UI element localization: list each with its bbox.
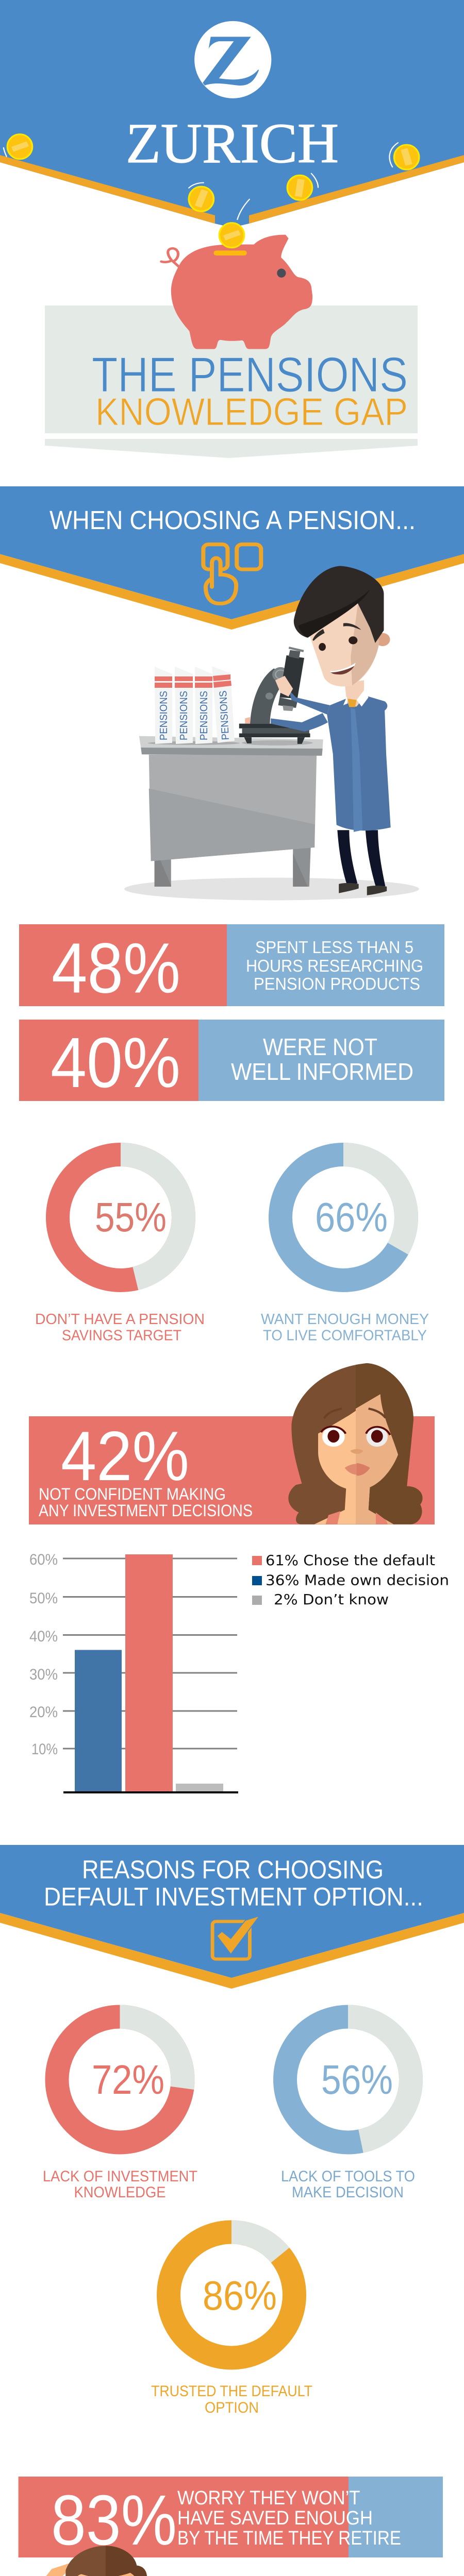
icon: piggy bank with coins	[4, 134, 419, 349]
stat description: PENSION PRODUCTS	[254, 974, 420, 993]
books labelled pensions	[155, 666, 235, 744]
section heading: REASONS FOR CHOOSING	[82, 1855, 384, 1884]
stat description: WORRY THEY WON’T	[177, 2487, 360, 2509]
stat description: HAVE SAVED ENOUGH	[177, 2507, 373, 2529]
section heading: DEFAULT INVESTMENT OPTION...	[44, 1883, 423, 1911]
stat description: SPENT LESS THAN 5	[255, 938, 413, 957]
stat description: NOT CONFIDENT MAKING	[39, 1485, 226, 1503]
header banner	[0, 0, 464, 228]
donut: 66 percent live comfortably: TO LIVE COMFORTABLY	[263, 1327, 427, 1344]
icon: Zurich Z logo	[194, 21, 271, 98]
stat description	[231, 1033, 413, 1085]
books labelled pensions: PENSIONS	[178, 691, 190, 740]
chart legend: 36% Made own decision	[266, 1571, 449, 1589]
stat description: HOURS RESEARCHING	[246, 956, 423, 975]
donut: 72 percent lack of knowledge: LACK OF INVESTMENT	[43, 2168, 197, 2185]
section heading: WHEN CHOOSING A PENSION...	[49, 505, 416, 535]
panel: 83 percent worry	[19, 2477, 443, 2560]
chart legend: 61% Chose the default	[266, 1552, 435, 1569]
bar chart: default vs own decision: 30%	[29, 1666, 58, 1683]
stat description: BY THE TIME THEY RETIRE	[177, 2528, 401, 2549]
stat number: 42%	[61, 1417, 189, 1495]
chart legend: 2% Don’t know	[274, 1591, 389, 1608]
stat description	[246, 938, 423, 993]
section heading	[44, 1855, 423, 1911]
icon: hand choosing a box	[203, 545, 261, 603]
bar chart: default vs own decision: 40%	[29, 1628, 58, 1645]
donut: 55 percent no savings target	[35, 1155, 205, 1344]
stat description: WERE NOT	[263, 1033, 377, 1060]
title text line 1: THE PENSIONS	[92, 347, 408, 402]
donut: 66 percent live comfortably: 66%	[315, 1194, 388, 1240]
stat number: 40%	[51, 1023, 180, 1103]
brand name: ZURICH	[126, 112, 339, 175]
bar chart: default vs own decision: 60%	[29, 1551, 58, 1568]
donut: 55 percent no savings target: 55%	[95, 1194, 167, 1240]
stat description	[177, 2487, 401, 2549]
stat description: ANY INVESTMENT DECISIONS	[39, 1501, 253, 1520]
donut: 72 percent lack of knowledge: 72%	[92, 2057, 164, 2103]
stat description: WELL INFORMED	[231, 1058, 413, 1085]
bar chart: default vs own decision: 20%	[29, 1704, 58, 1721]
illustration: worried woman	[288, 1363, 423, 1524]
donut: 55 percent no savings target: SAVINGS TARGET	[62, 1327, 181, 1344]
icon: ticked checkbox	[212, 1917, 258, 1959]
donut: 56 percent lack of tools	[281, 2016, 415, 2201]
section banner: choosing a pension	[0, 486, 464, 630]
donut: 56 percent lack of tools: LACK OF TOOLS TO	[281, 2168, 415, 2185]
stat row: 40 percent	[19, 1020, 444, 1103]
donut: 72 percent lack of knowledge	[43, 2016, 197, 2201]
stat number: 83%	[51, 2481, 177, 2560]
donut: 55 percent no savings target: DON’T HAVE A PENSION	[35, 1311, 205, 1328]
donut: 66 percent live comfortably	[261, 1155, 429, 1344]
donut: 72 percent lack of knowledge: KNOWLEDGE	[74, 2184, 166, 2201]
chart legend	[252, 1552, 449, 1608]
section banner: reasons for default	[0, 1845, 464, 1989]
stat number: 48%	[52, 928, 180, 1008]
title text line 2: KNOWLEDGE GAP	[95, 390, 408, 433]
donut: 56 percent lack of tools: 56%	[321, 2057, 393, 2103]
books labelled pensions: PENSIONS	[158, 691, 170, 740]
donut: 86 percent trusted default: TRUSTED THE DEFAULT	[151, 2383, 312, 2400]
donut: 86 percent trusted default: OPTION	[205, 2399, 259, 2416]
illustration: desk, microscope and man	[124, 566, 419, 900]
title panel	[45, 306, 418, 458]
donut: 56 percent lack of tools: MAKE DECISION	[292, 2184, 404, 2201]
books labelled pensions: PENSIONS	[218, 690, 231, 740]
books labelled pensions: PENSIONS	[198, 691, 210, 740]
bar chart: default vs own decision: 10%	[31, 1741, 58, 1758]
stat description	[39, 1485, 253, 1520]
panel: 42 percent not confident	[29, 1416, 435, 1524]
illustration: worried bearded man with bill	[27, 2546, 216, 2576]
donut: 86 percent trusted default	[151, 2232, 312, 2416]
bar chart: default vs own decision	[29, 1551, 238, 1793]
stat row: 48 percent	[19, 924, 444, 1008]
donut: 66 percent live comfortably: WANT ENOUGH MONEY	[261, 1311, 429, 1328]
donut: 86 percent trusted default: 86%	[203, 2273, 277, 2318]
bar chart: default vs own decision: 50%	[29, 1590, 58, 1607]
